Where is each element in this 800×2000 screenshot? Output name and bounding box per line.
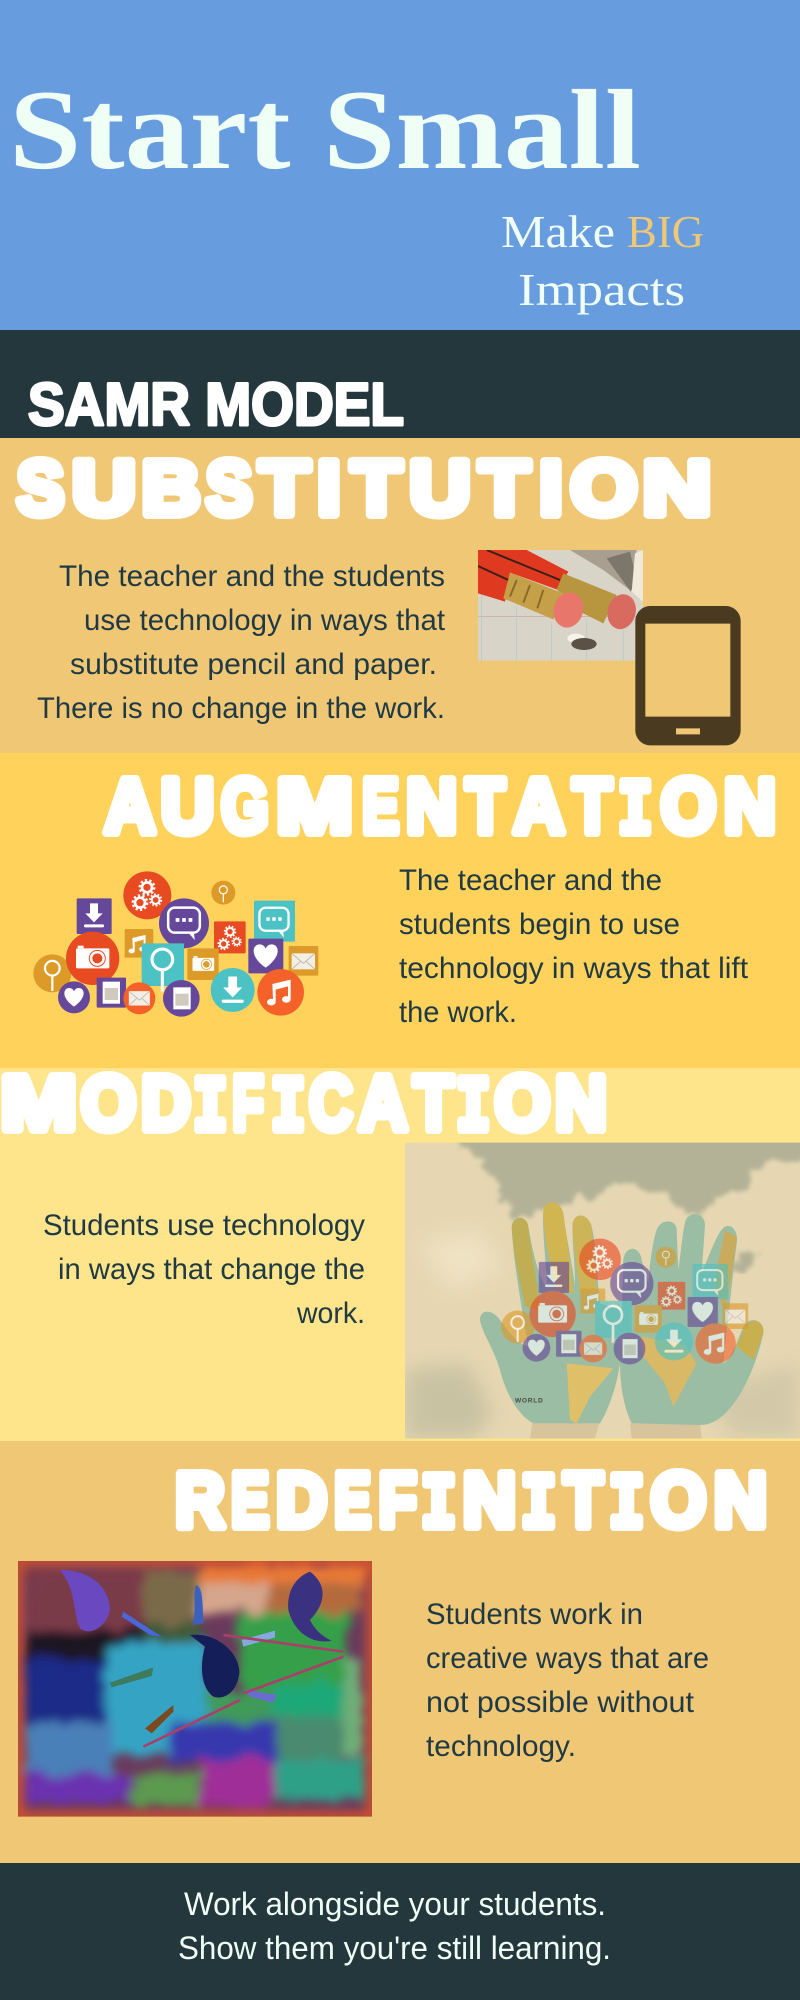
heading: AUGMENTATION: T	[573, 764, 612, 850]
text: augmentation description: technology in ways that lift	[399, 952, 749, 985]
heading: SUBSTITUTION: U	[72, 446, 136, 532]
heading: AUGMENTATION: N	[406, 764, 457, 850]
heading: REDEFINITION: T	[564, 1458, 603, 1544]
subtitle line: Make BIG	[501, 206, 704, 257]
text: modification description: work.	[296, 1297, 365, 1330]
text: modification description: Students use technology	[43, 1209, 365, 1242]
text: footer message: Show them you're still learning.	[178, 1930, 611, 1966]
text: substitution description: use technology in ways that	[84, 604, 446, 637]
heading: AUGMENTATION: M	[277, 764, 353, 850]
heading: MODIFICATION: T	[414, 1060, 454, 1146]
heading: MODIFICATION: I	[193, 1066, 228, 1154]
heading: AUGMENTATION: T	[466, 764, 505, 850]
heading: SUBSTITUTION: O	[571, 446, 637, 532]
heading: MODIFICATION: I	[271, 1066, 306, 1154]
heading: AUGMENTATION: U	[161, 764, 214, 850]
heading: SUBSTITUTION: I	[317, 446, 340, 532]
text: footer message: Work alongside your students.	[184, 1886, 606, 1922]
heading: REDEFINITION: F	[379, 1458, 417, 1544]
heading: MODIFICATION: O	[495, 1060, 550, 1146]
heading: REDEFINITION: E	[231, 1458, 269, 1544]
heading: REDEFINITION: D	[276, 1458, 327, 1544]
heading: REDEFINITION: R	[175, 1458, 225, 1544]
heading: MODIFICATION: F	[232, 1060, 264, 1146]
heading: SUBSTITUTION: N	[643, 446, 711, 532]
heading: REDEFINITION: E	[334, 1458, 371, 1544]
subtitle line: Impacts: Impacts	[518, 264, 685, 315]
panel: title header	[0, 0, 800, 330]
panel: modification	[0, 1060, 800, 1441]
title: Start Small: Start Small	[9, 66, 641, 193]
panel: substitution	[0, 438, 800, 753]
text: augmentation description: the work.	[399, 996, 517, 1029]
heading: SUBSTITUTION: T	[479, 446, 530, 532]
heading: MODIFICATION: C	[309, 1060, 353, 1146]
heading: SAMR MODEL: SAMR MODEL	[28, 371, 404, 438]
heading: REDEFINITION: I	[521, 1464, 556, 1550]
heading: REDEFINITION: N	[463, 1458, 516, 1544]
heading: SUBSTITUTION: S	[17, 446, 64, 532]
heading: MODIFICATION: I	[456, 1066, 490, 1154]
text: substitution description	[37, 560, 446, 725]
heading: REDEFINITION: N	[714, 1458, 767, 1544]
photo: abstract painting	[18, 1561, 372, 1817]
photo: world map hands with icons: WORLD	[515, 1397, 543, 1404]
text: redefinition description: technology.	[426, 1730, 576, 1763]
icon cluster: app icons	[33, 871, 318, 1017]
heading: MODIFICATION: N	[555, 1060, 607, 1146]
heading: AUGMENTATION: I	[618, 770, 652, 856]
heading: REDEFINITION: I	[609, 1464, 644, 1550]
text: redefinition description	[426, 1598, 709, 1763]
heading: REDEFINITION: O	[651, 1458, 706, 1544]
text: augmentation description	[399, 864, 749, 1029]
photo: pencils on paper	[478, 550, 643, 661]
heading: MODIFICATION: A	[358, 1060, 408, 1146]
subtitle line: Make BIG: Make	[501, 206, 615, 257]
heading: SUBSTITUTION: I	[539, 446, 562, 532]
text: augmentation description: students begin to use	[399, 908, 680, 941]
panel: redefinition	[0, 1441, 800, 1863]
heading: AUGMENTATION: A	[513, 764, 564, 850]
icon cluster: translucent overlay	[501, 1239, 748, 1365]
heading: AUGMENTATION: N	[724, 764, 776, 850]
heading: MODIFICATION: M	[1, 1060, 77, 1146]
heading: MODIFICATION: D	[141, 1060, 191, 1146]
heading: SUBSTITUTION: B	[142, 446, 200, 532]
text: footer message	[178, 1886, 611, 1966]
heading: REDEFINITION: I	[421, 1464, 456, 1550]
text: modification description	[43, 1209, 365, 1330]
text: augmentation description: The teacher and the	[399, 864, 662, 897]
text: modification description: in ways that change the	[58, 1253, 365, 1286]
heading: SUBSTITUTION: T	[351, 446, 402, 532]
heading: SUBSTITUTION: U	[410, 446, 470, 532]
text: substitution description: There is no change in the work.	[37, 692, 445, 725]
text: redefinition description: not possible without	[426, 1686, 695, 1719]
heading: AUGMENTATION: A	[104, 764, 156, 850]
heading: AUGMENTATION: E	[362, 764, 399, 850]
subtitle line: Make BIG: BIG	[627, 206, 704, 257]
photo: world map hands with icons	[405, 1130, 800, 1439]
text: substitution description: substitute pencil and paper.	[70, 648, 437, 681]
panel: footer	[0, 1863, 800, 2000]
text: redefinition description: Students work in	[426, 1598, 643, 1631]
heading: AUGMENTATION: G	[221, 764, 269, 850]
heading: MODIFICATION: O	[81, 1060, 136, 1146]
panel: SAMR model band	[0, 330, 800, 438]
text: redefinition description: creative ways that are	[426, 1642, 709, 1675]
heading: AUGMENTATION: O	[661, 764, 716, 850]
panel: augmentation	[0, 753, 800, 1068]
text: substitution description: The teacher and the students	[59, 560, 445, 593]
heading: SUBSTITUTION: T	[259, 446, 310, 532]
icon: tablet	[635, 606, 741, 745]
heading: SUBSTITUTION: S	[206, 446, 252, 532]
